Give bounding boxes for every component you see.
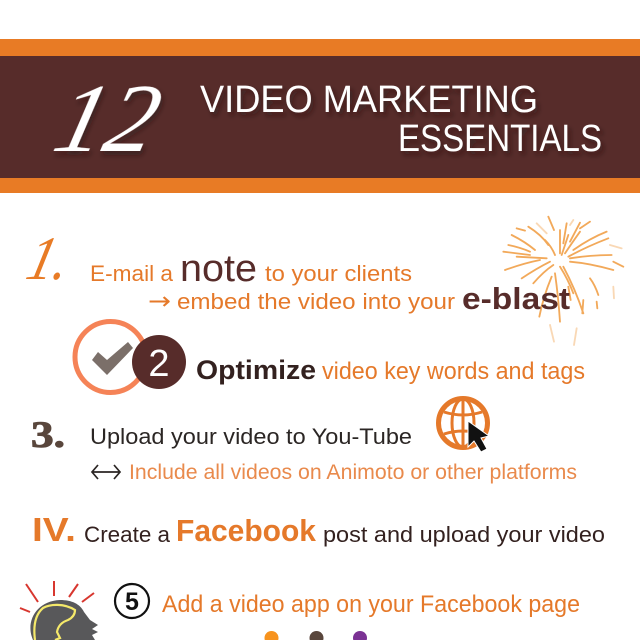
icon: check mark in ring [75, 322, 146, 392]
icon: double arrow [92, 465, 120, 479]
step 2 [75, 322, 585, 392]
step 2 text: video key words and tags [322, 358, 585, 385]
step 4 text: Create a [84, 522, 171, 547]
title number 12: 12 [45, 63, 172, 173]
icon: number 2 badge [132, 335, 186, 389]
step 1 line 1: to your clients [265, 261, 412, 286]
step 4 text: post and upload your video [323, 522, 605, 547]
icon: speaking head [20, 581, 98, 640]
icon: number 5 circle [115, 584, 149, 618]
title line 1: VIDEO MARKETING [200, 79, 538, 121]
title line 2: ESSENTIALS [398, 118, 602, 160]
step 4 [32, 511, 605, 548]
step 1 numeral: 1. [21, 224, 78, 293]
step 4 numeral: IV. [32, 511, 76, 548]
step 4 text: Facebook [176, 513, 317, 548]
step 1 line 2: embed the video into your [177, 289, 455, 314]
step 1 line 2: e-blast [462, 281, 570, 316]
icon: globe with cursor [438, 398, 489, 452]
step 1 line 1: note [180, 248, 257, 290]
step 1 line 2: → [148, 287, 171, 315]
step 3 [31, 398, 577, 484]
icon: fireworks [503, 217, 623, 345]
step 3 numeral: 3. [31, 415, 65, 456]
step 3 line 1: Upload your video to You-Tube [90, 424, 412, 449]
step 1 line 1: E-mail a [90, 261, 174, 286]
step 5 [20, 581, 580, 640]
colored dots [264, 631, 367, 640]
header banner [0, 39, 640, 193]
icon: number 5 circle: 5 [125, 588, 139, 616]
step 1 [21, 224, 570, 316]
step 5 text: Add a video app on your Facebook page [162, 591, 580, 618]
step 3 line 2: Include all videos on Animoto or other platforms [129, 461, 577, 484]
icon: number 2 badge: 2 [148, 343, 170, 385]
step 2 text: Optimize [196, 355, 316, 385]
